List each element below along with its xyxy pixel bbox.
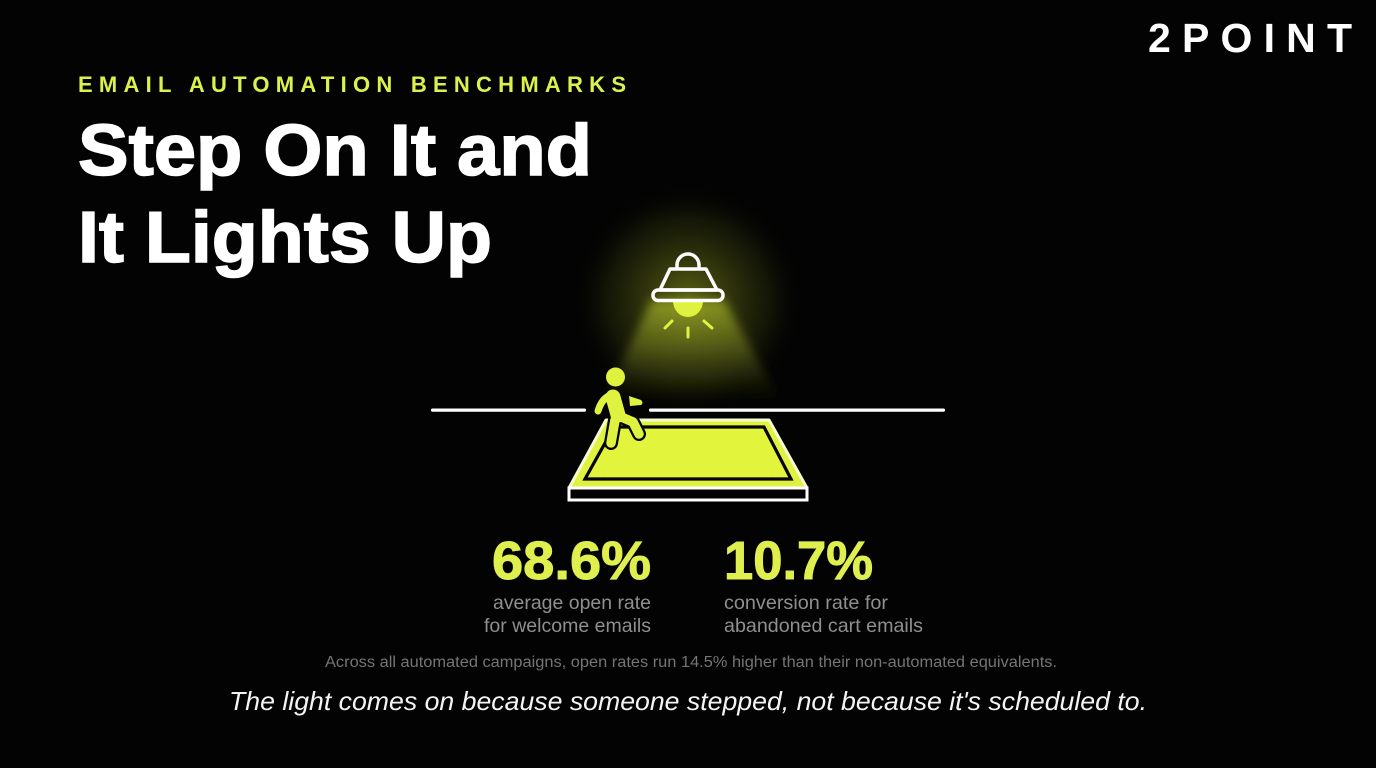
lamp shade <box>653 254 723 300</box>
icon: walking person <box>598 368 642 443</box>
light glow <box>572 184 804 416</box>
leg outline <box>611 416 639 443</box>
stat: welcome open rate <box>484 531 651 637</box>
horizon line left <box>431 408 586 412</box>
icon: ceiling lamp <box>653 254 723 337</box>
title <box>78 111 592 278</box>
title: It Lights Up <box>78 198 492 278</box>
illustration: lamp, person and lit floor mat <box>431 184 945 500</box>
stat description: average open rate <box>493 592 651 614</box>
title: Step On It and <box>78 111 592 191</box>
stat description <box>484 592 651 637</box>
footnote: Across all automated campaigns, open rates run 14.5% higher than their non-automated equivalents. <box>325 654 1057 671</box>
stat description: conversion rate for <box>724 592 889 614</box>
stat description: for welcome emails <box>484 615 651 637</box>
stat value: 68.6% <box>492 531 651 591</box>
lamp rays <box>665 321 712 337</box>
horizon line right <box>649 408 945 412</box>
eyebrow heading: EMAIL AUTOMATION BENCHMARKS <box>78 72 626 97</box>
floor mat <box>569 420 807 500</box>
stat description <box>724 592 923 637</box>
logo: 2POINT: 2POINT <box>1148 15 1352 61</box>
stat value: 10.7% <box>724 531 873 591</box>
lamp bulb <box>673 301 703 317</box>
stat: abandoned cart conversion <box>724 531 923 637</box>
closing line: The light comes on because someone stepped, not because it's scheduled to. <box>229 686 1147 716</box>
stat description: abandoned cart emails <box>724 615 923 637</box>
